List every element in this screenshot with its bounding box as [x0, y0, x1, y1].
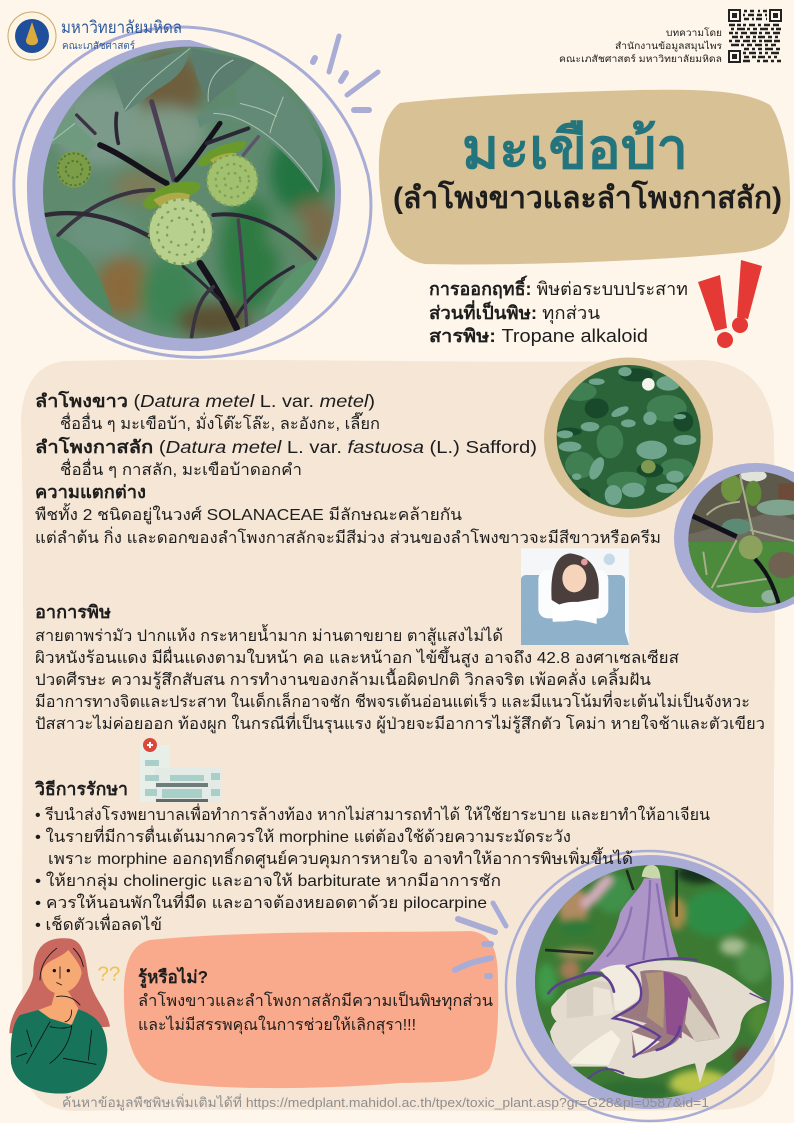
species names and difference: พืชทั้ง 2 ชนิดอยู่ในวงศ์ SOLANACEAE มีลักษณะคล้ายกัน — [35, 503, 462, 525]
heading: symptoms: อาการพิษ — [35, 602, 111, 622]
toxicity facts: ส่วนที่เป็นพิษ: ทุกส่วน — [429, 300, 600, 324]
icon: hospital — [140, 738, 221, 802]
illustration: thinking woman — [9, 938, 120, 1094]
symptoms text: มีอาการทางจิตและประสาท ในเด็กเล็กอาจชัก ชีพจรเต้นอ่อนแต่เร็ว และมีแนวโน้มที่จะเต้นไม่เป็นจังหวะ — [35, 690, 750, 711]
symptoms text — [35, 624, 765, 734]
callout text: และไม่มีสรรพคุณในการช่วยให้เลิกสุรา!!! — [138, 1015, 416, 1035]
species names and difference: ชื่ออื่น ๆ กาสลัก, มะเขือบ้าดอกคำ — [60, 458, 302, 479]
treatment list: • ควรให้นอนพักในที่มืด และอาจต้องหยอดตาด้วย pilocarpine — [35, 891, 487, 912]
subtitle: (ลำโพงขาวและลำโพงกาสลัก) — [393, 179, 782, 215]
credits — [559, 27, 722, 65]
heading: university name — [61, 18, 182, 52]
symptoms text: ผิวหนังร้อนแดง มีผื่นแดงตามใบหน้า คอ และหน้าอก ไข้ขึ้นสูง อาจถึง 42.8 องศาเซลเซียส — [35, 646, 679, 668]
heading: university name: มหาวิทยาลัยมหิดล — [61, 18, 182, 37]
species names and difference: ลำโพงขาว (Datura metel L. var. metel ) — [35, 390, 375, 411]
treatment list — [35, 803, 710, 934]
photo: spiny fruit with lavender rings — [14, 27, 371, 357]
species names and difference — [35, 390, 661, 547]
decoration: lavender dashes — [313, 36, 378, 110]
callout text: ลำโพงขาวและลำโพงกาสลักมีความเป็นพิษทุกส่วน — [138, 990, 493, 1011]
heading: treatment: วิธีการรักษา — [34, 779, 128, 799]
toxicity facts — [429, 275, 688, 346]
panel: body — [21, 360, 775, 1111]
symptoms text: ปัสสาวะไม่ค่อยออก ท้องผูก ในกรณีที่เป็นรุนแรง ผู้ป่วยจะมีอาการไม่รู้สึกตัว โคม่า หายใจช้าและตัวเขียว — [35, 712, 765, 734]
title blob — [379, 90, 790, 264]
photo: white datura bush — [544, 358, 713, 518]
callout text: รู้หรือไม่? — [138, 966, 208, 989]
symptoms text: ปวดศีรษะ ความรู้สึกสับสน การทำงานของกล้ามเนื้อผิดปกติ วิกลจริต เพ้อคลั่ง เคลิ้มฝัน — [35, 668, 651, 690]
logo: Mahidol University — [8, 12, 56, 60]
toxicity facts: การออกฤทธิ์: พิษต่อระบบประสาท — [429, 275, 688, 299]
treatment list: เพราะ morphine ออกฤทธิ์กดศูนย์ควบคุมการหายใจ อาจทำให้อาการพิษเพิ่มขึ้นได้ — [48, 847, 633, 869]
species names and difference: ลำโพงกาสลัก (Datura metel L. var. fastuosa (L.) Safford) — [35, 436, 537, 457]
illustration: thinking woman: ?? — [97, 963, 120, 986]
title: มะเขือบ้า — [462, 117, 688, 180]
illustration: sick woman in bed — [521, 548, 629, 645]
icon: exclamation marks — [698, 260, 762, 348]
symptoms text: สายตาพร่ามัว ปากแห้ง กระหายน้ำมาก ม่านตาขยาย ตาสู้แสงไม่ได้ — [35, 624, 503, 646]
toxicity facts: สารพิษ: Tropane alkaloid — [429, 326, 648, 346]
heading: university name: คณะเภสัชศาสตร์ — [62, 40, 136, 52]
treatment list: • ในรายที่มีการตื่นเต้นมากควรให้ morphine แต่ต้องใช้ด้วยความระมัดระวัง — [35, 825, 571, 846]
species names and difference: ความแตกต่าง — [35, 482, 146, 502]
treatment list: • รีบนำส่งโรงพยาบาลเพื่อทำการล้างท้อง หากไม่สามารถทำได้ ให้ใช้ยาระบาย และยาทำให้อาเจียน — [35, 803, 710, 824]
species names and difference: ชื่ออื่น ๆ มะเขือบ้า, มั่งโต๊ะโล๊ะ, ละอังกะ, เลี๊ยก — [60, 412, 380, 433]
photo: purple datura stem — [674, 463, 794, 613]
callout text — [138, 966, 493, 1035]
QR code — [728, 9, 782, 63]
treatment list: • ให้ยากลุ่ม cholinergic และอาจให้ barbiturate หากมีอาการชัก — [35, 871, 501, 891]
credits: สำนักงานข้อมูลสมุนไพร — [615, 40, 722, 52]
footer link: ค้นหาข้อมูลพืชพิษเพิ่มเติมได้ที่ https://medplant.mahidol.ac.th/tpex/toxic_plant.asp?gr=G28&pl=0587&id=1 — [62, 1094, 709, 1111]
treatment list: • เช็ดตัวเพื่อลดไข้ — [35, 913, 162, 934]
callout blob — [124, 931, 498, 1088]
credits: บทความโดย — [666, 27, 722, 39]
decoration: callout dashes — [455, 903, 506, 976]
credits: คณะเภสัชศาสตร์ มหาวิทยาลัยมหิดล — [559, 53, 722, 65]
photo: purple datura flower with rings — [506, 851, 792, 1121]
species names and difference: แต่ลำต้น กิ่ง และดอกของลำโพงกาสลักจะมีสีม่วง ส่วนของลำโพงขาวจะมีสีขาวหรือครีม — [35, 526, 661, 547]
